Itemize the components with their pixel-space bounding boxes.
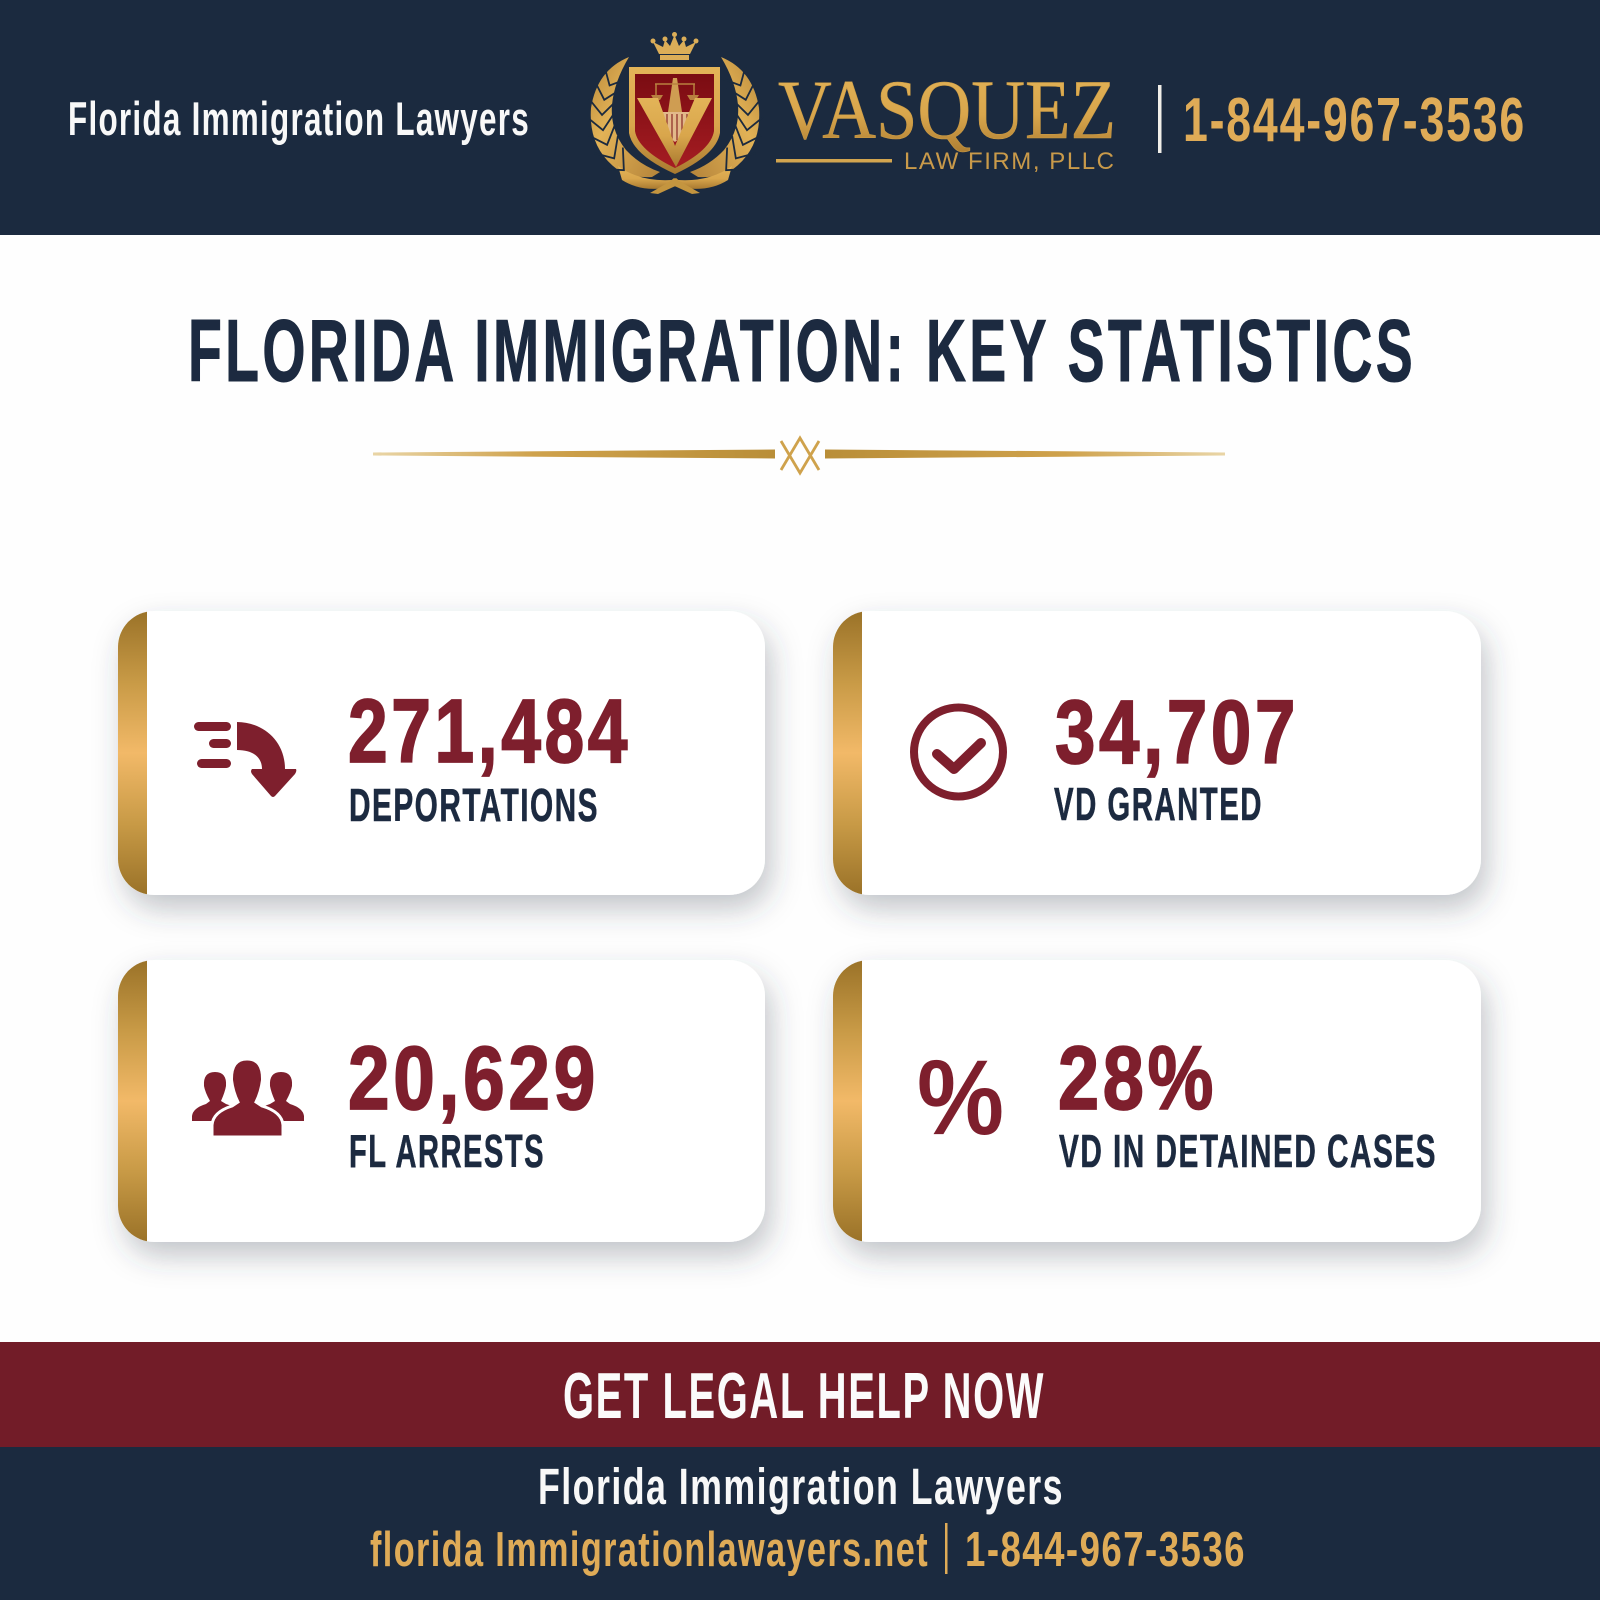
icon: check circle: [914, 708, 1003, 796]
header divider: [1158, 85, 1162, 153]
stat value: 28%: [1058, 1029, 1217, 1129]
stat value: 34,707: [1055, 683, 1299, 783]
ornamental title divider: [373, 438, 1225, 473]
footer website: florida Immigrationlawayers.net: [370, 1523, 929, 1577]
stat value: 20,629: [348, 1029, 599, 1129]
wordmark VASQUEZ: VASQUEZ: [778, 63, 1116, 157]
panel: VD granted: [833, 611, 1481, 895]
header title text: Florida Immigration Lawyers: [68, 92, 530, 145]
call to action text: GET LEGAL HELP NOW: [563, 1359, 1045, 1432]
call to action band: [0, 1342, 1600, 1447]
panel: deportations: [118, 611, 765, 895]
wordmark subline: LAW FIRM, PLLC: [904, 148, 1114, 175]
panel: FL arrests: [118, 960, 765, 1242]
stat label: DEPORTATIONS: [349, 779, 599, 831]
footer divider: [945, 1523, 948, 1574]
panel: VD in detained cases: [833, 960, 1481, 1242]
header band: [0, 0, 1600, 235]
icon: laurel wreath: [587, 57, 763, 194]
stat label: VD GRANTED: [1054, 778, 1263, 830]
logo: Vasquez Law Firm crest and wordmark: [587, 32, 1116, 194]
icon: percent sign: %: [917, 1037, 1004, 1157]
footer band: [0, 1447, 1600, 1600]
footer firm name: Florida Immigration Lawyers: [538, 1458, 1064, 1515]
footer phone number: 1-844-967-3536: [965, 1523, 1246, 1577]
stat label: FL ARRESTS: [349, 1125, 545, 1177]
icon: crown: [650, 32, 698, 60]
stat value: 271,484: [348, 682, 631, 782]
icon: deportation arrow: [194, 722, 296, 797]
wordmark rule: [776, 159, 892, 162]
icon: shield: [629, 67, 720, 174]
icon: group of people: [192, 1059, 304, 1137]
